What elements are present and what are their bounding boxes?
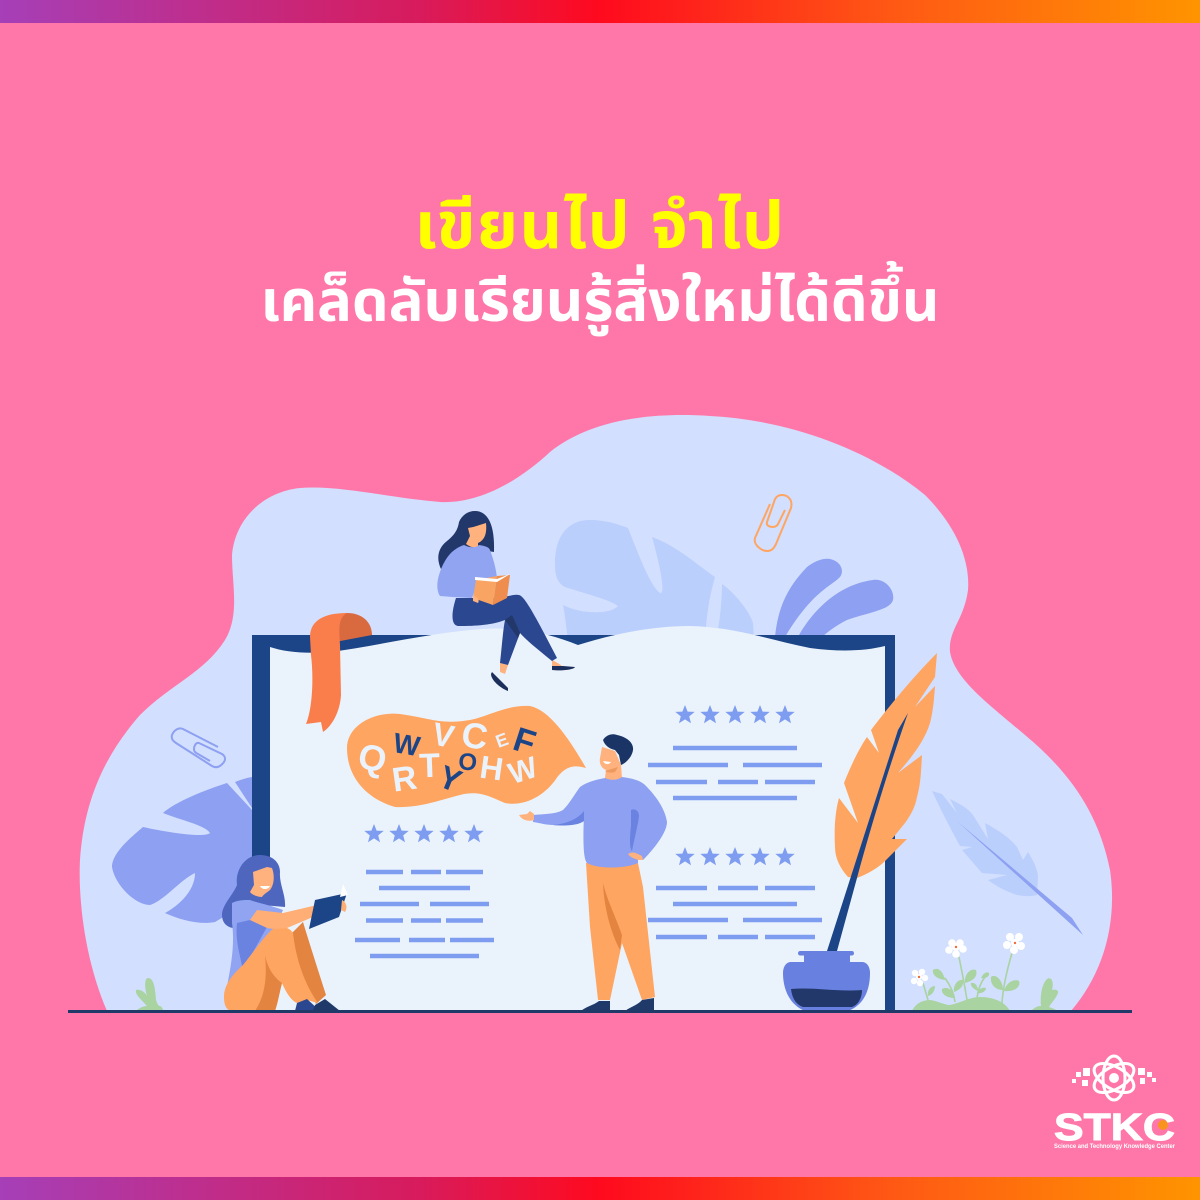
leaf: top pale monstera — [555, 520, 754, 640]
title line 1: เขียนไป จำไป — [415, 188, 785, 262]
star row 3 — [364, 824, 484, 842]
speech bubble with letters: T — [419, 747, 441, 785]
ground line — [68, 1010, 1132, 1013]
speech bubble with letters: F — [509, 720, 540, 763]
quill feather — [827, 653, 937, 951]
top gradient bar — [0, 0, 1200, 23]
speech bubble with letters: W — [391, 727, 423, 762]
speech bubble with letters — [347, 706, 586, 807]
speech bubble with letters: E — [493, 729, 511, 752]
speech bubble with letters: R — [390, 759, 419, 800]
ink bottle — [783, 951, 870, 1011]
star row 1 — [675, 705, 795, 723]
paperclip: blue — [172, 728, 225, 767]
STKC logo — [1054, 1056, 1176, 1150]
text lines: top right — [648, 748, 822, 798]
leaf: top blue sprouts — [775, 559, 893, 637]
bookmark ribbon — [306, 613, 372, 732]
background blob — [80, 415, 1112, 1011]
book page — [270, 626, 885, 1011]
paperclip: orange — [755, 495, 791, 551]
speech bubble with letters: V — [429, 715, 458, 755]
speech bubble with letters: O — [457, 748, 478, 777]
leaf: left blue monstera — [112, 777, 252, 923]
title line 2: เคล็ดลับเรียนรู้สิ่งใหม่ได้ดีขึ้น — [261, 269, 939, 334]
woman reading on top of book — [437, 511, 575, 691]
feather: pale background — [932, 791, 1083, 935]
woman sitting with book — [222, 855, 348, 1011]
book cover frame — [252, 635, 895, 1011]
text lines: lower right — [648, 888, 822, 937]
speech bubble with letters: Y — [433, 758, 467, 799]
speech bubble with letters: W — [504, 751, 542, 791]
man presenting — [519, 734, 667, 1011]
speech bubble with letters: C — [459, 714, 490, 758]
STKC logo: Science and Technology Knowledge Center — [1054, 1144, 1176, 1150]
star row 2 — [675, 847, 795, 865]
text lines: left — [355, 872, 494, 956]
speech bubble with letters: Q — [355, 735, 391, 781]
bottom gradient bar — [0, 1177, 1200, 1200]
ground plants and flowers — [136, 933, 1058, 1011]
speech bubble with letters: H — [478, 749, 505, 788]
STKC logo: STKC — [1054, 1107, 1175, 1149]
